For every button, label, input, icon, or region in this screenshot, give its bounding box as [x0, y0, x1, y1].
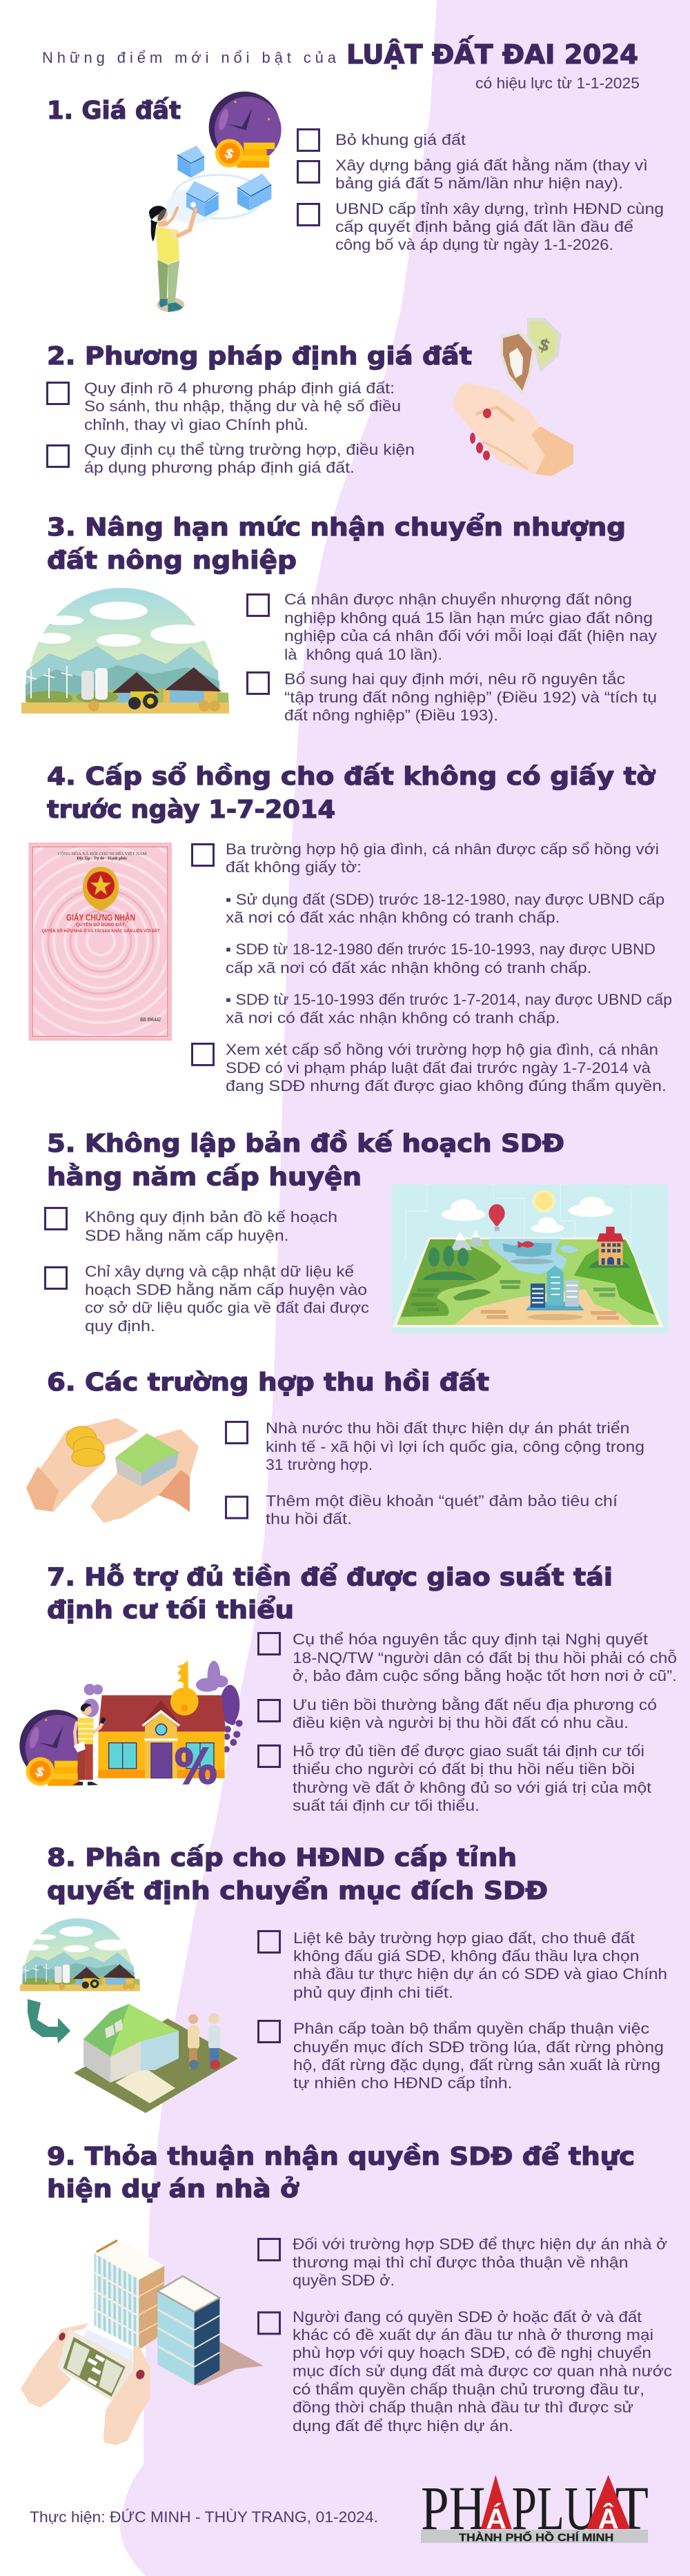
panel: section 8 phân cấp HĐND	[20, 1844, 667, 2113]
heading 9: hiện dự án nhà ở	[47, 2175, 299, 2203]
text block: hộ, đất rừng đặc dụng, đất rừng sản xuất là rừng	[293, 2056, 660, 2074]
checkbox	[258, 1931, 280, 1953]
illustration: pink land certificate	[29, 843, 172, 1041]
illustration: pink land certificate: CỘNG HÒA XÃ HỘI CHỦ NGHĨA VIỆT NAM	[58, 851, 146, 856]
illustration: hands with tablet and buildings	[21, 2239, 264, 2445]
text block	[226, 840, 672, 1094]
checkbox	[46, 1267, 66, 1289]
text block: bảng giá đất 5 năm/lần như hiện nay).	[335, 175, 623, 192]
checkbox	[298, 161, 319, 182]
checkbox	[46, 1208, 66, 1230]
checkbox	[258, 2021, 280, 2043]
logo: Pháp Luật TP.HCM: Â	[598, 2501, 619, 2535]
panel: section 6 thu hồi đất	[26, 1368, 644, 1528]
text block: mục đích sử dụng đất mà được cơ quan nhà nước	[293, 2363, 672, 2380]
illustration: handshake with price tags	[452, 318, 573, 476]
text block: Cụ thể hóa nguyên tắc quy định tại Nghị quyết	[293, 1631, 648, 1648]
text block: Cá nhân được nhận chuyển nhượng đất nông	[284, 591, 632, 608]
text block: điều kiện và người bị thu hồi đất có nhu cầu.	[293, 1714, 629, 1731]
text block: ▪ SDĐ từ 18-12-1980 đến trước 15-10-1993, nay được UBND	[226, 941, 656, 958]
checkbox	[298, 204, 319, 225]
illustration: pink land certificate: QUYỀN SỬ DỤNG ĐẤT,	[76, 921, 126, 927]
checkbox	[258, 1746, 280, 1767]
text block: Ưu tiên bồi thường bằng đất nếu địa phương có	[293, 1696, 657, 1713]
checkbox	[47, 382, 69, 404]
text block: chỉnh, thay vì giao Chính phủ.	[84, 416, 308, 433]
logo: Pháp Luật TP.HCM: PLU	[512, 2475, 597, 2543]
text block: áp dụng phương pháp định giá đất.	[84, 459, 355, 476]
text block: phủ quy định chi tiết.	[293, 1984, 453, 2001]
arrow: farm land converts to residential land	[28, 1999, 70, 2043]
text block	[293, 1631, 677, 1814]
checkbox	[226, 1422, 247, 1444]
footer credit: Thực hiện: ĐỨC MINH - THÙY TRANG, 01-2024.	[30, 2508, 378, 2526]
text block	[284, 591, 657, 724]
illustration: house, key, man and percent sign	[19, 1661, 243, 1795]
text block: So sánh, thu nhập, thặng dư và hệ số điều	[84, 397, 401, 415]
heading 5: hằng năm cấp huyện	[47, 1163, 362, 1191]
text block: SDĐ có vi phạm pháp luật đất đai trước ngày 1-7-2014 và	[226, 1059, 651, 1076]
heading 7	[47, 1563, 613, 1624]
text block: đất không giấy tờ:	[226, 858, 362, 876]
illustration: pink land certificate: Độc lập - Tự do - Hạnh phúc	[77, 857, 128, 861]
checkbox	[258, 1700, 280, 1721]
text block	[266, 1419, 644, 1528]
checkbox	[247, 595, 269, 616]
illustration: woman with houses, clock and coins	[149, 92, 282, 312]
heading 8: 8. Phân cấp cho HĐND cấp tỉnh	[47, 1844, 517, 1872]
illustration: house and couple	[74, 2004, 238, 2113]
text block: xã nơi có đất xác nhận không có tranh chấp.	[226, 909, 560, 926]
text block: cơ sở dữ liệu quốc gia về đất đai được	[85, 1299, 369, 1317]
text block: kinh tế - xã hội vì lợi ích quốc gia, công cộng trong	[266, 1438, 644, 1455]
heading 8: quyết định chuyển mục đích SDĐ	[47, 1876, 548, 1905]
text block: quyền SDĐ ở.	[293, 2272, 395, 2289]
text block	[84, 380, 415, 476]
text block: Đối với trường hợp SDĐ để thực hiện dự án nhà ở	[293, 2236, 667, 2252]
illustration: farm landscape	[21, 588, 229, 714]
text block: Xây dựng bảng giá đất hằng năm (thay vì	[335, 157, 648, 174]
text block: Ba trường hợp hộ gia đình, cá nhân được cấp sổ hồng với	[226, 840, 659, 858]
illustration: pink land certificate: GIẤY CHỨNG NHẬN	[66, 912, 135, 923]
text block: hoạch SDĐ hằng năm cấp huyện vào	[85, 1281, 367, 1299]
logo: Pháp Luật TP.HCM: PH	[421, 2475, 485, 2543]
illustration: small farm landscape	[20, 1918, 140, 1991]
title	[42, 36, 640, 92]
text block: thiểu cho người có đất bị thu hồi nếu tiền bồi	[293, 1760, 635, 1778]
text block: “tập trung đất nông nghiệp” (Điều 192) và “tích tụ	[284, 689, 657, 706]
text block: Liệt kê bảy trường hợp giao đất, cho thuê đất	[293, 1929, 635, 1947]
text block: ▪ Sử dụng đất (SDĐ) trước 18-12-1980, nay được UBND cấp	[226, 891, 664, 908]
text block: UBND cấp tỉnh xây dựng, trình HĐND cùng	[335, 200, 664, 217]
title lead-in: Những điểm mới nổi bật của	[42, 49, 337, 66]
panel: section 2 phương pháp định giá đất	[47, 318, 573, 476]
text block: Chỉ xây dựng và cập nhật dữ liệu kế	[85, 1263, 354, 1280]
illustration: pink land certificate: QUYỀN SỞ HỮU NHÀ Ở VÀ TÀI SẢN KHÁC GẮN LIỀN VỚI ĐẤT	[41, 927, 160, 934]
heading 3	[47, 513, 626, 575]
title main: LUẬT ĐẤT ĐAI 2024	[346, 36, 638, 70]
checkbox	[226, 1497, 247, 1518]
text block: cấp xã nơi có đất xác nhận không có tranh chấp.	[226, 959, 592, 976]
text block: Hỗ trợ đủ tiền để được giao suất tái định cư tối	[293, 1742, 644, 1760]
logo: Pháp Luật TP.HCM: T	[615, 2475, 649, 2543]
checkbox	[192, 1043, 214, 1065]
logo: Pháp Luật TP.HCM: Á	[486, 2502, 506, 2535]
heading 4	[47, 762, 656, 824]
text block: đồng thời chấp thuận nhà đầu tư thì được sử	[293, 2399, 633, 2416]
text block: khác có đề xuất dự án đầu tư nhà ở thương mại	[293, 2326, 653, 2343]
text block: là không quá 10 lần).	[284, 646, 442, 663]
heading 6: 6. Các trường hợp thu hồi đất	[47, 1368, 489, 1397]
checkbox	[298, 130, 319, 150]
text block: Phân cấp toàn bộ thẩm quyền chấp thuận việc	[293, 2020, 649, 2037]
heading 3: đất nông nghiệp	[47, 547, 297, 575]
text block: ▪ SDĐ từ 15-10-1993 đến trước 1-7-2014, nay được UBND cấp	[226, 991, 672, 1008]
heading 5: 5. Không lập bản đồ kế hoạch SDĐ	[47, 1130, 564, 1158]
text block: Bỏ khung giá đất	[335, 131, 466, 148]
text block: Xem xét cấp sổ hồng với trường hợp hộ gia đình, cá nhân	[226, 1041, 658, 1059]
text block: có thẩm quyền chấp thuận chủ trương đầu tư,	[293, 2381, 644, 2398]
heading 4: trước ngày 1-7-2014	[47, 796, 335, 824]
text block: chuyển mục đích SDĐ trồng lúa, đất rừng phòng	[293, 2038, 664, 2056]
text block: 31 trường hợp.	[266, 1456, 373, 1473]
text block: phù hợp với quy hoạch SDĐ, có đề nghị chuyển	[293, 2344, 651, 2361]
text block: thu hồi đất.	[266, 1511, 352, 1528]
heading 8	[47, 1844, 548, 1905]
heading 9	[47, 2142, 635, 2203]
text block: Người đang có quyền SDĐ ở hoặc đất ở và đất	[293, 2308, 642, 2326]
text block: tự nhiên cho HĐND cấp tỉnh.	[293, 2074, 512, 2092]
text block: Nhà nước thu hồi đất thực hiện dự án phát triển	[266, 1419, 629, 1437]
text block: Thêm một điều khoản “quét” đảm bảo tiêu chí	[266, 1492, 618, 1510]
text block: công bố và áp dụng từ ngày 1-1-2026.	[335, 236, 613, 253]
text block	[335, 131, 664, 253]
logo: Pháp Luật TP.HCM: THÀNH PHỐ HỒ CHÍ MINH	[459, 2532, 613, 2544]
text block: quy định.	[85, 1317, 155, 1335]
heading 1: 1. Giá đất	[47, 97, 181, 125]
text block: cấp quyết định bảng giá đất lần đầu để	[335, 218, 633, 235]
text block: 18-NQ/TW “người dân có đất bị thu hồi phải có chỗ	[293, 1649, 677, 1666]
heading 3: 3. Nâng hạn mức nhận chuyển nhượng	[47, 513, 626, 542]
effective date: có hiệu lực từ 1-1-2025	[475, 75, 640, 92]
heading 4: 4. Cấp sổ hồng cho đất không có giấy tờ	[47, 762, 656, 791]
checkbox	[247, 672, 269, 694]
text block: thường về đất ở không đủ so với giá trị của một	[293, 1779, 651, 1796]
checkbox	[192, 845, 214, 865]
text block: Bổ sung hai quy định mới, nêu rõ nguyên tắc	[284, 671, 625, 687]
heading 9: 9. Thỏa thuận nhận quyền SDĐ để thực	[47, 2142, 635, 2171]
text block: ở, bảo đảm cuộc sống bằng hoặc tốt hơn nơi ở cũ”.	[293, 1667, 677, 1684]
text block: suất tái định cư tối thiểu.	[293, 1797, 480, 1814]
text block: đất nông nghiệp” (Điều 193).	[284, 707, 498, 724]
logo: Pháp Luật TP.HCM	[421, 2475, 649, 2544]
checkbox	[47, 446, 69, 466]
text block: Quy định cụ thể từng trường hợp, điều kiện	[84, 441, 415, 458]
panel: section 4 cấp sổ hồng	[0, 762, 672, 1094]
checkbox	[258, 2312, 280, 2334]
text block: nghiệp không quá 15 lần hạn mức giao đất nông	[284, 609, 653, 627]
illustration: hands holding coins and a house	[26, 1418, 199, 1523]
panel: section 1 giá đất	[47, 92, 664, 312]
text block: nghiệp của cá nhân đối với mỗi loại đất (hiện nay	[284, 627, 657, 645]
text block: đang SDĐ nhưng đất được giao không đúng thẩm quyền.	[226, 1077, 667, 1094]
illustration: house, key, man and percent sign: %	[175, 1740, 217, 1795]
text block: SDĐ hằng năm cấp huyện.	[85, 1227, 288, 1244]
text block	[293, 1929, 667, 2092]
heading 5	[47, 1130, 564, 1191]
panel: section 9 thỏa thuận nhận quyền SDĐ	[21, 2142, 672, 2445]
text block: Quy định rõ 4 phương pháp định giá đất:	[84, 380, 395, 397]
panel: section 7 hỗ trợ tái định cư	[19, 1563, 677, 1814]
illustration: pink land certificate: BB 896442	[140, 1016, 161, 1023]
heading 7: định cư tối thiểu	[47, 1595, 294, 1624]
panel: section 3 nâng hạn mức	[21, 513, 657, 724]
text block: xã nơi có đất xác nhận không có tranh chấp.	[226, 1009, 560, 1027]
text block: dụng đất để thực hiện dự án.	[293, 2417, 513, 2435]
text block: thương mại thì chỉ được thỏa thuận về nhận	[293, 2254, 628, 2271]
text block	[85, 1208, 369, 1335]
illustration: handshake with price tags: $	[535, 334, 553, 356]
heading 7: 7. Hỗ trợ đủ tiền để được giao suất tái	[47, 1563, 613, 1592]
checkbox	[258, 2239, 280, 2261]
text block	[293, 2236, 672, 2435]
checkbox	[258, 1633, 280, 1655]
text block: không đấu giá SDĐ, không đấu thầu lựa chọn	[293, 1947, 639, 1965]
text block: Không quy định bản đồ kế hoạch	[85, 1208, 337, 1226]
text block: nhà đầu tư thực hiện dự án có SDĐ và giao Chính	[293, 1965, 667, 1983]
heading 2: 2. Phương pháp định giá đất	[47, 342, 472, 371]
panel: section 5 không lập bản đồ	[46, 1130, 668, 1335]
illustration: land-use map	[392, 1185, 668, 1333]
